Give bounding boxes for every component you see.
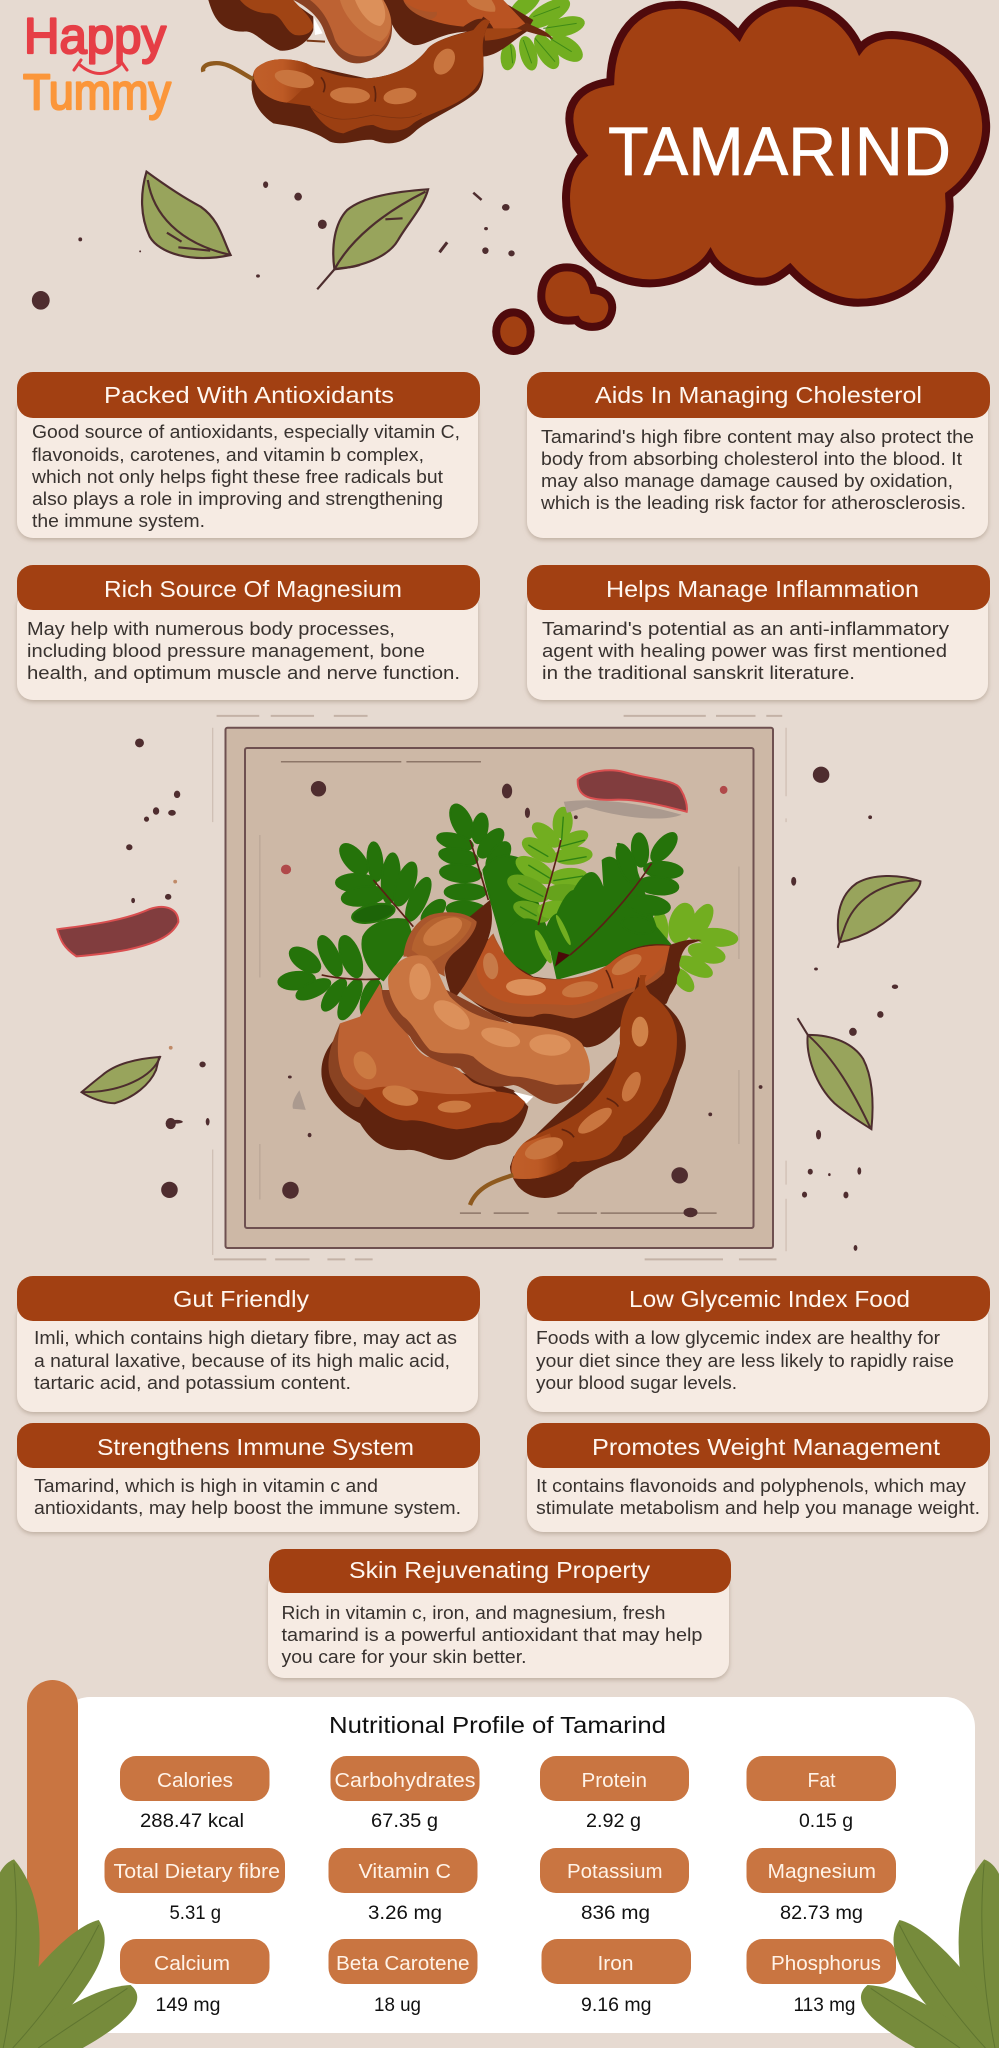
panel: Strengthens Immune System (17, 1423, 480, 1532)
nutrient: Beta Carotene: Beta Carotene (336, 1953, 470, 1975)
title: TAMARIND (608, 113, 951, 190)
panel: Helps Manage Inflammation: agent with healing power was first mentioned (542, 641, 947, 661)
callout: thought cloud with title (496, 3, 986, 351)
nutrient: Total Dietary fibre: 5.31 g (170, 1903, 221, 1924)
panel: Skin Rejuvenating Property: Rich in vitamin c, iron, and magnesium, fresh (282, 1603, 666, 1623)
slices, leaves and seeds around the frame (57, 738, 920, 1251)
cloud bubbles (496, 267, 612, 351)
illustration: green leaves bottom left (0, 1859, 137, 2048)
panel: Promotes Weight Management: stimulate metabolism and help you manage weight. (536, 1498, 980, 1518)
panel: Aids In Managing Cholesterol: body from absorbing cholesterol into the blood. It (541, 449, 962, 469)
nutrient: Iron: Iron (598, 1953, 634, 1975)
panel: Helps Manage Inflammation: Tamarind's potential as an anti-inflammatory (542, 619, 949, 639)
illustration: green leaves bottom right (861, 1859, 999, 2048)
nutrient: Protein (540, 1756, 689, 1832)
nutrient: Calories: Calories (157, 1770, 233, 1792)
nutrient: Fat: 0.15 g (799, 1811, 853, 1832)
nutrient: Magnesium (746, 1848, 896, 1924)
panel: Skin Rejuvenating Property: tamarind is a powerful antioxidant that may help (282, 1625, 702, 1645)
nutrient: Potassium (540, 1848, 689, 1924)
logo: Happy Tummy (23, 8, 171, 120)
illustration: framed tamarind artwork with surrounding leaves (57, 716, 920, 1259)
panel: Skin Rejuvenating Property: you care for your skin better. (282, 1647, 526, 1667)
nutrient: Fat: Fat (808, 1770, 836, 1792)
nutrient: Protein: Protein (582, 1770, 647, 1792)
panel: Gut Friendly: tartaric acid, and potassium content. (34, 1373, 351, 1393)
panel: Low Glycemic Index Food: Low Glycemic Index Food (629, 1286, 910, 1312)
panel: Helps Manage Inflammation: in the traditional sanskrit literature. (542, 663, 855, 683)
panel: Packed With Antioxidants: also plays a role in improving and strengthening (32, 489, 443, 509)
frame (213, 716, 786, 1259)
nutrient: Phosphorus (746, 1939, 896, 2016)
panel: Strengthens Immune System: Tamarind, which is high in vitamin c and (34, 1476, 378, 1496)
panel: Strengthens Immune System: Strengthens Immune System (97, 1434, 414, 1460)
illustration: top tamarind pods (203, 0, 586, 143)
nutrient: Iron: 9.16 mg (581, 1995, 652, 2016)
nutrient: Phosphorus: Phosphorus (771, 1953, 881, 1975)
panel: Helps Manage Inflammation (527, 565, 990, 700)
panel: Helps Manage Inflammation: Helps Manage Inflammation (606, 576, 919, 602)
nutrient: Carbohydrates: Carbohydrates (334, 1770, 476, 1792)
panel: nutritional profile (27, 1680, 975, 2033)
nutrient: Vitamin C: Vitamin C (358, 1861, 451, 1883)
nutrient: Carbohydrates (330, 1756, 480, 1832)
pod slice: top (564, 770, 687, 819)
cloud (566, 3, 986, 303)
panel: Aids In Managing Cholesterol: Tamarind's high fibre content may also protect the (541, 427, 974, 447)
panel: Gut Friendly: a natural laxative, because of its high malic acid, (34, 1351, 450, 1371)
panel: Low Glycemic Index Food: your diet since they are less likely to rapidly raise (536, 1351, 954, 1371)
nutrient: Calcium: 149 mg (156, 1995, 220, 2016)
panel: Packed With Antioxidants: Good source of antioxidants, especially vitamin C, (32, 422, 460, 442)
nutrient: Beta Carotene (328, 1939, 478, 2016)
heading: Nutritional Profile of Tamarind (329, 1712, 666, 1738)
logo: Happy Tummy: Tummy (23, 64, 171, 120)
nutrient: Carbohydrates: 67.35 g (371, 1811, 438, 1832)
nutrient: Calcium: Calcium (154, 1953, 230, 1975)
panel: Rich Source Of Magnesium (17, 565, 480, 700)
panel: Low Glycemic Index Food: your blood sugar levels. (536, 1373, 737, 1393)
illustration: two green leaves and specks (32, 172, 515, 310)
panel: Packed With Antioxidants: which not only helps fight these free radicals but (31, 467, 443, 487)
panel: Aids In Managing Cholesterol (527, 372, 990, 538)
nutrient: Calcium (120, 1939, 270, 2016)
nutrient: Phosphorus: 113 mg (794, 1995, 856, 2016)
nutrient: Total Dietary fibre: Total Dietary fibre (114, 1861, 280, 1883)
nutrient: Vitamin C: 3.26 mg (368, 1903, 442, 1924)
pod slice: left (57, 907, 178, 956)
panel: Promotes Weight Management (527, 1423, 990, 1532)
panel: Rich Source Of Magnesium: Rich Source Of Magnesium (104, 576, 402, 602)
panel: Low Glycemic Index Food: Foods with a low glycemic index are healthy for (536, 1328, 940, 1348)
leaf: right top (838, 876, 920, 948)
leaf: left lower (82, 1056, 161, 1103)
tamarind branches and pods (278, 801, 738, 1205)
panel: Packed With Antioxidants: flavonoids, carotenes, and vitamin b complex, (32, 445, 424, 465)
panel: Aids In Managing Cholesterol: which is the leading risk factor for atherosclerosis. (540, 493, 966, 513)
nutrient: Fat (746, 1756, 896, 1832)
panel: Gut Friendly: Gut Friendly (173, 1286, 310, 1312)
panel: Promotes Weight Management: It contains flavonoids and polyphenols, which may (536, 1476, 966, 1496)
nutrient: Iron (542, 1939, 691, 2016)
logo: Happy Tummy: Happy (24, 8, 166, 64)
panel: Rich Source Of Magnesium: health, and optimum muscle and nerve function. (27, 663, 460, 683)
nutrient: Beta Carotene: 18 ug (374, 1995, 421, 2016)
panel: Skin Rejuvenating Property: Skin Rejuvenating Property (349, 1557, 651, 1583)
panel: Low Glycemic Index Food (527, 1276, 990, 1412)
orange side bar (27, 1680, 78, 1990)
panel: Rich Source Of Magnesium: including blood pressure management, bone (27, 641, 425, 661)
leaf: right lower (798, 1018, 873, 1129)
panel: Rich Source Of Magnesium: May help with numerous body processes, (27, 619, 395, 639)
panel: Packed With Antioxidants: Packed With Antioxidants (104, 382, 394, 408)
panel: Promotes Weight Management: Promotes Weight Management (592, 1434, 941, 1460)
nutrient: Calories: 288.47 kcal (140, 1811, 244, 1832)
panel: Gut Friendly: Imli, which contains high dietary fibre, may act as (34, 1328, 457, 1348)
nutrient: Magnesium: 82.73 mg (780, 1903, 863, 1924)
panel: Aids In Managing Cholesterol: Aids In Managing Cholesterol (595, 382, 922, 408)
nutrient: Calories (120, 1756, 270, 1832)
nutrient: Potassium: Potassium (567, 1861, 662, 1883)
nutrient: Potassium: 836 mg (581, 1903, 650, 1924)
panel: Strengthens Immune System: antioxidants, may help boost the immune system. (34, 1498, 461, 1518)
nutrient: Vitamin C (328, 1848, 478, 1924)
panel: Aids In Managing Cholesterol: may also manage damage caused by oxidation, (541, 471, 953, 491)
panel: Skin Rejuvenating Property (268, 1549, 731, 1678)
panel: Packed With Antioxidants (17, 372, 480, 538)
panel: Gut Friendly (17, 1276, 480, 1412)
nutrient: Protein: 2.92 g (586, 1811, 641, 1832)
nutrient: Total Dietary fibre (104, 1848, 285, 1924)
nutrient: Magnesium: Magnesium (768, 1861, 876, 1883)
panel: Packed With Antioxidants: the immune system. (32, 511, 205, 531)
